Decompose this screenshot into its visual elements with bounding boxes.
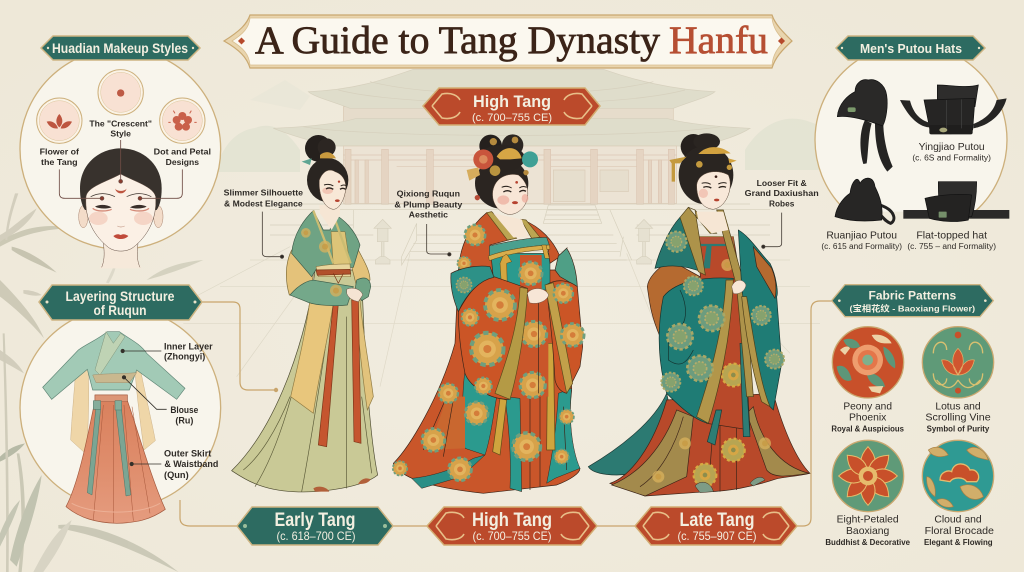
fabric labels: Phoenix: [849, 413, 887, 424]
upper robe: [458, 213, 515, 278]
right sleeve: [738, 230, 782, 410]
sleeves: [290, 280, 353, 306]
labels: Inner Layer: [164, 341, 213, 351]
hat: flat-topped: [903, 182, 1009, 222]
gold sashes: [493, 343, 555, 455]
connector lines: [180, 301, 833, 526]
label: & Plump Beauty: [394, 200, 463, 209]
labels: [40, 118, 211, 167]
left teal sleeve: [659, 278, 733, 423]
fabric labels: Peony and: [843, 401, 892, 412]
chest panel: [490, 253, 550, 290]
central panel: [505, 287, 548, 397]
medallion: peony and phoenix: [832, 327, 904, 398]
panel: Huadian makeup styles: [20, 49, 221, 268]
labels: (Zhongyi): [164, 352, 205, 362]
fabric labels: Floral Brocade: [925, 526, 994, 537]
banner: Layering Structure of Ruqun: [39, 285, 202, 320]
labels: the Tang: [41, 157, 78, 167]
hat labels: (c. 6S and Formality): [912, 154, 991, 163]
skirt: [232, 270, 378, 492]
label: Robes: [769, 200, 795, 209]
banner: High Tang bottom: (c. 700–755 CE): [472, 529, 552, 543]
stole panels: [291, 300, 333, 413]
hat: Ruanjiao: [835, 178, 894, 223]
banner: Early Tang: Early Tang: [274, 510, 356, 531]
waistband: [489, 237, 549, 256]
banner: High Tang top: High Tang: [473, 92, 551, 111]
hat labels: [821, 142, 996, 251]
label: Aesthetic: [409, 211, 449, 220]
figure: Early Tang woman: [224, 135, 378, 492]
shawl: [286, 250, 370, 297]
banner: Layering Structure of Ruqun: of Ruqun: [94, 302, 146, 318]
head: [697, 212, 728, 233]
gold trim: [697, 280, 733, 423]
callout: [427, 224, 451, 256]
icon: flower of the Tang circle: [37, 98, 82, 143]
banner: Late Tang: (c. 755–907 CE): [678, 529, 756, 543]
hat: soft wrapped with tails: [837, 80, 893, 172]
green top: [292, 211, 360, 277]
labels: Designs: [166, 157, 199, 167]
head: [305, 135, 332, 162]
background palace: [170, 69, 820, 387]
bamboo decoration: [0, 193, 203, 572]
hat labels: Ruanjiao Putou: [826, 230, 897, 241]
banner: Huadian Makeup Styles: [41, 36, 200, 60]
banner: Early Tang: [237, 507, 393, 545]
collar: [487, 212, 540, 240]
callout: [262, 212, 284, 258]
label: & Modest Elegance: [224, 200, 303, 209]
callout lines: [59, 140, 182, 200]
shoes: [313, 478, 371, 492]
labels: Dot and Petal: [154, 147, 211, 157]
background mist mountains: [215, 80, 835, 172]
hands: [527, 289, 549, 303]
banner: Huadian Makeup Styles: Huadian Makeup Styles: [52, 41, 188, 56]
label: Looser Fit &: [757, 179, 807, 188]
left sleeve: [458, 277, 527, 399]
banner: High Tang top: (c. 700–755 CE): [472, 112, 552, 124]
labels: & Waistband: [164, 459, 218, 469]
hat labels: (c. 755 – and Formality): [907, 242, 996, 251]
title text: Hanfu: [669, 19, 768, 62]
labels: (Qun): [164, 470, 189, 480]
title text: A Guide to Tang Dynasty: [255, 19, 661, 62]
banner: High Tang bottom: [427, 507, 597, 545]
icon: face with huadian: [79, 148, 163, 268]
label: [224, 189, 304, 209]
title plaque: [224, 15, 792, 68]
labels: The "Crescent": [89, 118, 152, 128]
left shoulder: [655, 217, 705, 273]
fabric labels: Royal & Auspicious: [831, 424, 905, 433]
fabric labels: Buddhist & Decorative: [825, 538, 911, 547]
teal skirt panels: [462, 370, 497, 455]
panel: layering structure of ruqun: [20, 308, 221, 523]
panel: fabric patterns: [825, 285, 994, 547]
icon: top huadian circle: [98, 70, 143, 115]
label: Qixiong Ruqun: [397, 190, 460, 199]
banner: Early Tang: (c. 618–700 CE): [276, 529, 356, 543]
fabric labels: Scrolling Vine: [925, 413, 991, 424]
left outer sleeve: [647, 260, 700, 337]
label: Grand Daxiushan: [745, 189, 819, 198]
panel: men's putou hats: [815, 44, 1009, 251]
banner: Men's Putou Hats: Men's Putou Hats: [860, 41, 962, 56]
figure: High Tang woman: [393, 134, 584, 493]
medallion: lotus and vine: [922, 327, 994, 398]
medallion: cloud and floral brocade: [922, 440, 994, 512]
callout: [762, 213, 782, 248]
labels: Outer Skirt: [164, 449, 211, 459]
label: [394, 190, 463, 220]
hat: Yingjiao: [900, 85, 1007, 134]
labels: Style: [110, 129, 131, 139]
fabric labels: Eight-Petaled: [837, 515, 899, 526]
garment illustration: [43, 332, 185, 523]
fabric labels: Elegant & Flowing: [924, 538, 993, 547]
fabric labels: Cloud and: [934, 515, 982, 526]
banner: fabric patterns: [832, 285, 993, 317]
banner: Late Tang: [635, 507, 797, 545]
hat labels: Yingjiao Putou: [919, 142, 985, 153]
banner: fabric patterns: Fabric Patterns: [868, 288, 957, 302]
hat labels: (c. 615 and Formality): [821, 242, 902, 251]
banner: fabric patterns: (宝相花纹 - Baoxiang Flower): [849, 303, 975, 314]
labels: Flower of: [40, 147, 79, 157]
banner: High Tang bottom: High Tang: [472, 510, 552, 531]
head: [475, 158, 528, 209]
banner: Men's Putou Hats: [836, 36, 985, 60]
fabric labels: [825, 401, 994, 547]
lower robe base: [393, 270, 580, 493]
banner: High Tang top: [423, 88, 600, 125]
labels: [164, 341, 218, 480]
icon: dot and petal circle: [160, 98, 205, 143]
banner: Layering Structure of Ruqun: Layering Structure: [66, 288, 175, 304]
fabric labels: Lotus and: [935, 401, 981, 412]
label: Slimmer Silhouette: [224, 189, 304, 198]
medallion: eight-petaled baoxiang: [832, 440, 904, 512]
right sleeve: [555, 248, 577, 287]
central gown: [697, 237, 750, 430]
hat labels: Flat-topped hat: [916, 230, 987, 241]
waistband: [316, 264, 351, 277]
red sashes: [318, 300, 361, 447]
figure: Late Tang woman: [588, 133, 819, 496]
fabric labels: Symbol of Purity: [927, 424, 990, 433]
train and skirt: [588, 393, 673, 475]
labels: (Ru): [175, 416, 193, 426]
banner: Late Tang: Late Tang: [680, 510, 754, 531]
fabric labels: Baoxiang: [846, 526, 889, 537]
labels: Blouse: [170, 405, 198, 415]
callout lines: [121, 349, 167, 466]
label: [745, 179, 819, 209]
